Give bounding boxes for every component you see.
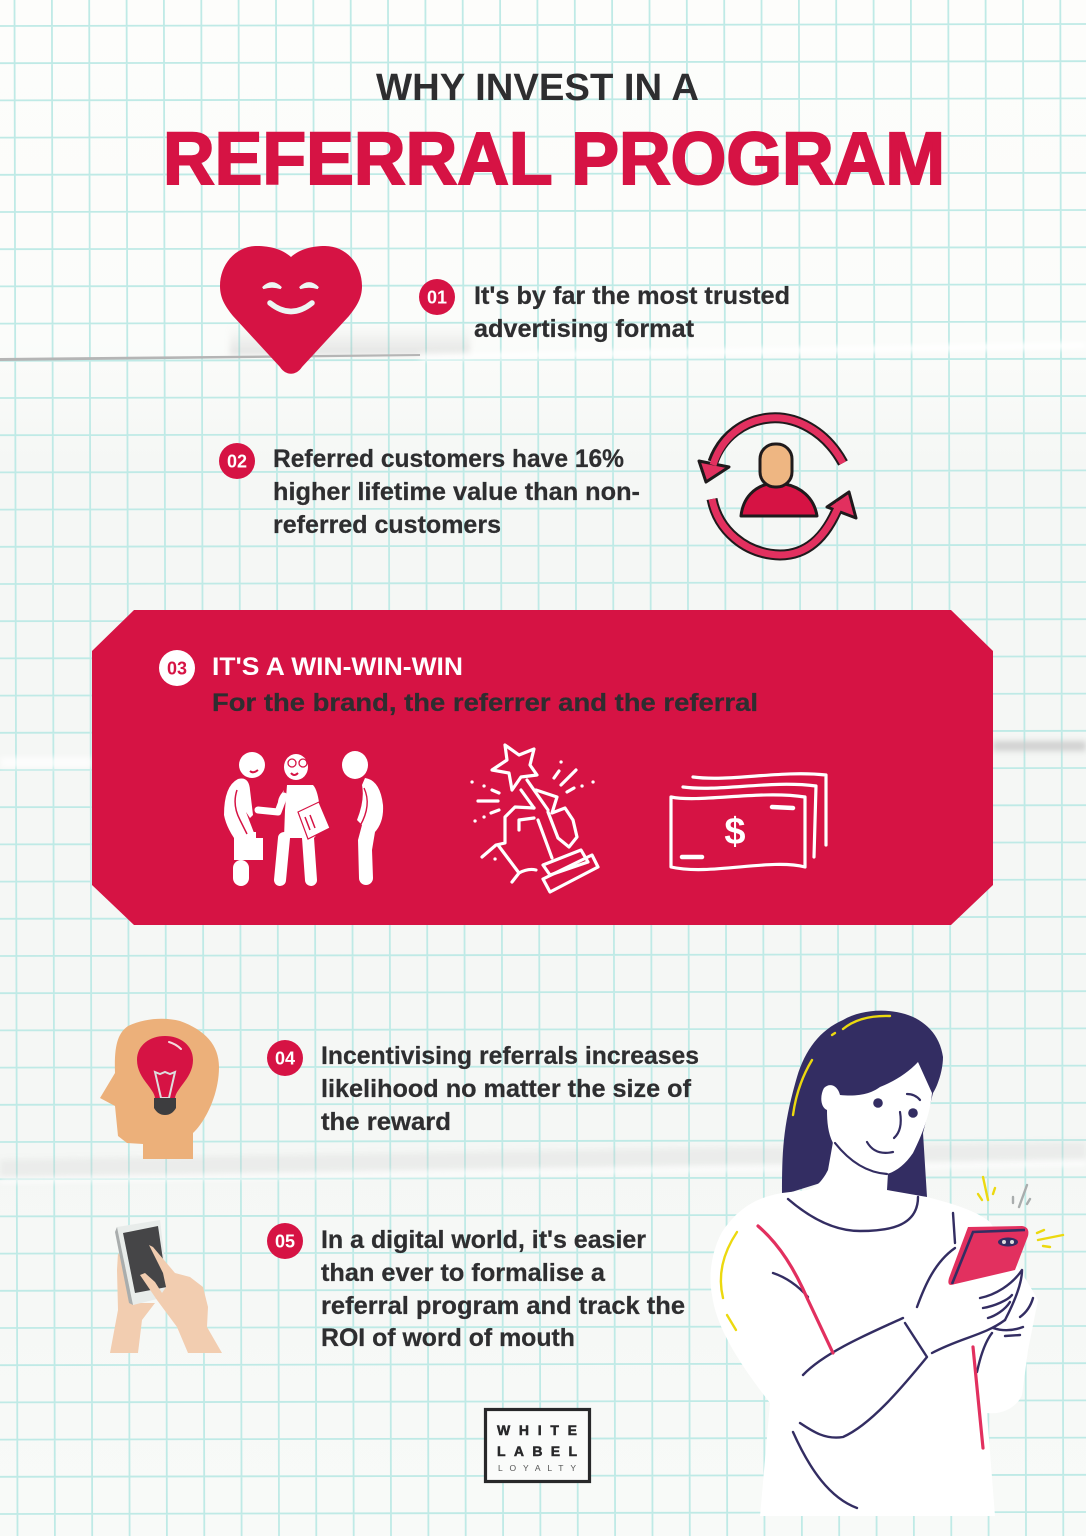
- number badge 02: 02: [227, 452, 247, 472]
- icon: banknotes: $: [724, 811, 746, 853]
- face: [821, 1062, 932, 1174]
- text 02: referred customers: [273, 511, 501, 539]
- text 05: [321, 1226, 685, 1352]
- text 04: the reward: [321, 1108, 451, 1136]
- text 02: higher lifetime value than non-: [273, 478, 640, 506]
- panel heading: IT'S A WIN-WIN-WIN: [212, 653, 463, 681]
- panel subheading: For the brand, the referrer and the referral: [212, 689, 758, 717]
- number badge 05: [267, 1223, 303, 1259]
- text 05: ROI of word of mouth: [321, 1324, 575, 1352]
- number badge 01: [419, 279, 455, 315]
- grey phone sparks: [1013, 1185, 1030, 1207]
- point 02: [219, 443, 640, 539]
- icon: three people: [224, 751, 383, 886]
- number badge 01: 01: [427, 288, 447, 308]
- icon: hands holding phone: [110, 1220, 222, 1353]
- text 05: than ever to formalise a: [321, 1259, 606, 1287]
- text 05: In a digital world, it's easier: [321, 1226, 646, 1254]
- number badge 04: 04: [275, 1048, 295, 1068]
- body silhouette: [710, 1142, 1038, 1516]
- title: [163, 67, 945, 200]
- logo: White Label Loyalty: LOYALTY: [498, 1463, 576, 1473]
- text 04: Incentivising referrals increases: [321, 1042, 699, 1070]
- title line: why invest: WHY INVEST IN A: [376, 67, 699, 109]
- title line: referral program: REFERRAL PROGRAM: [163, 117, 945, 200]
- icon: banknotes: [671, 774, 826, 870]
- logo: White Label Loyalty: LABEL: [497, 1443, 577, 1459]
- icon: customer with circular arrows: [699, 418, 856, 555]
- number badge 04: [267, 1040, 303, 1076]
- phone: [948, 1226, 1028, 1285]
- hair: [782, 1011, 943, 1197]
- point 04: [267, 1040, 699, 1136]
- yellow highlights: [721, 1016, 1063, 1330]
- point 05: [267, 1223, 685, 1352]
- text 01: It's by far the most trusted: [474, 282, 790, 310]
- text 02: [273, 445, 640, 539]
- point 01: [419, 279, 790, 343]
- panel: win-win-win: [92, 610, 993, 925]
- facial features: [835, 1094, 920, 1174]
- text 01: [474, 282, 790, 343]
- number badge 03: [159, 650, 195, 686]
- icon: head with light bulb: [100, 1019, 219, 1159]
- pink accent lines: [758, 1226, 983, 1448]
- icon: hand holding star trophy: [472, 745, 598, 892]
- text 02: Referred customers have 16%: [273, 445, 624, 473]
- text 04: [321, 1042, 699, 1136]
- text 04: likelihood no matter the size of: [321, 1075, 692, 1103]
- icon: smiling heart: [220, 246, 362, 374]
- logo: White Label Loyalty: [486, 1410, 590, 1482]
- illustration: woman using phone: [710, 1011, 1063, 1516]
- text 05: referral program and track the: [321, 1292, 685, 1320]
- number badge 03: 03: [167, 658, 187, 678]
- number badge 02: [219, 443, 255, 479]
- number badge 05: 05: [275, 1232, 295, 1252]
- logo: White Label Loyalty: WHITE: [497, 1422, 577, 1438]
- text 01: advertising format: [474, 315, 695, 343]
- clothing outlines: [773, 1197, 1033, 1508]
